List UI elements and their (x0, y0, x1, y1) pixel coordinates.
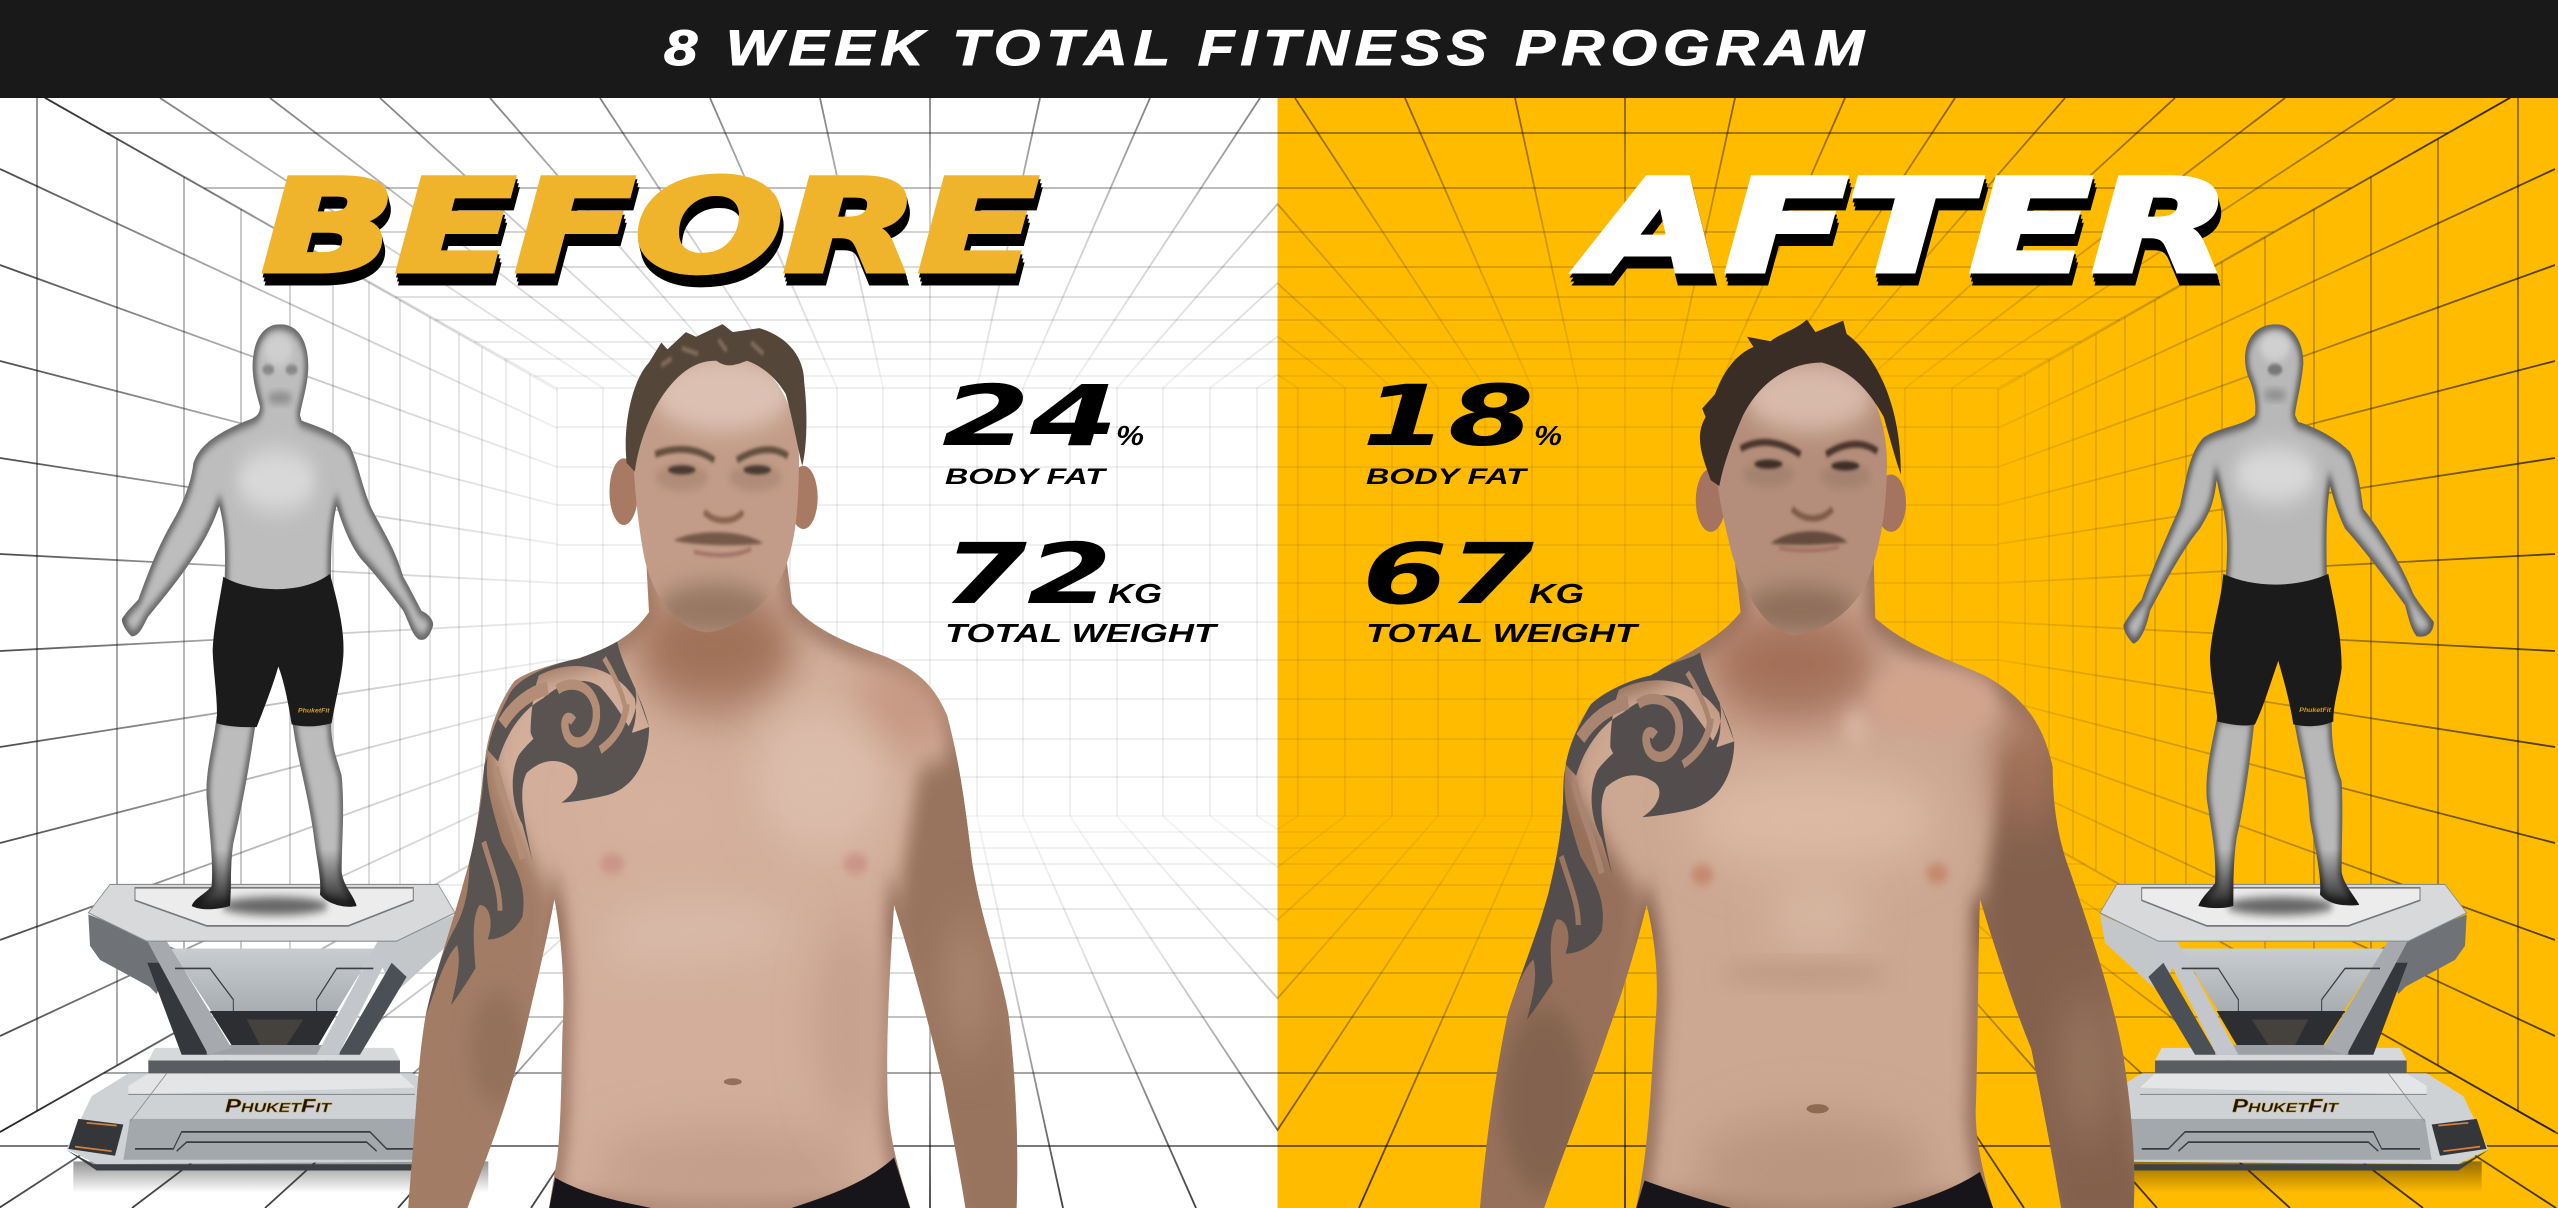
stat: after body fat: 18 (1362, 367, 1534, 465)
stat: after body fat: BODY FAT (1366, 464, 1528, 489)
torso and arms (1471, 538, 2150, 1208)
photo: before man (392, 324, 1040, 1208)
stat: before body fat (942, 367, 1144, 489)
stat: after total weight: 67 (1362, 525, 1535, 623)
panel: before background (0, 98, 1278, 1208)
pedestal: before scanner (67, 884, 488, 1193)
mannequin: before 3D scan (122, 324, 433, 912)
eyebrows, eyes, nose, mustache, mouth (1741, 442, 1877, 550)
stat: after total weight (1362, 525, 1640, 648)
stat: before total weight: 72 (942, 525, 1112, 623)
photo: after man (1471, 319, 2150, 1208)
stat: before total weight: TOTAL WEIGHT (945, 618, 1219, 648)
pedestal logo: before: PhuketFit (225, 1096, 332, 1116)
ears (609, 458, 638, 525)
stat: before total weight: KG (1108, 578, 1162, 609)
stat: after total weight: KG (1529, 578, 1584, 609)
mannequin: after 3D scan: PhuketFit (2299, 707, 2332, 714)
stat: before total weight (942, 525, 1219, 648)
shorts waistband (549, 1158, 910, 1208)
panel: after background (1278, 98, 2558, 1208)
stat: after total weight: TOTAL WEIGHT (1366, 618, 1640, 648)
pedestal: after scanner (2067, 884, 2488, 1193)
ears (1696, 469, 1726, 532)
eyebrows, eyes, nose, mustache, mouth (655, 449, 788, 555)
perspective grid: before room (0, 98, 1278, 1208)
title: 8 WEEK TOTAL FITNESS PROGRAM (664, 20, 1870, 76)
face (1716, 348, 1887, 635)
shorts waistband (1636, 1172, 1994, 1208)
header bar (0, 0, 2558, 98)
stat: before body fat: 24 (942, 367, 1118, 465)
pedestal logo: after: PhuketFit (2232, 1096, 2339, 1116)
nipples and navel (600, 853, 625, 874)
heading: after: AFTER (1573, 153, 2230, 302)
stat: after body fat (1362, 367, 1562, 489)
torso and arms (392, 538, 1040, 1208)
nipples and navel (1691, 865, 1713, 885)
hair (626, 324, 806, 472)
stat: before body fat: % (1116, 420, 1144, 451)
hair (1700, 319, 1901, 486)
mannequin: after 3D scan (2123, 324, 2434, 912)
heading: before: BEFORE (262, 153, 1038, 302)
face (633, 349, 799, 632)
perspective grid: after room (1278, 98, 2558, 1208)
stat: after body fat: % (1534, 420, 1562, 451)
mannequin: before 3D scan: PhuketFit (298, 708, 331, 715)
stat: before body fat: BODY FAT (945, 464, 1107, 489)
